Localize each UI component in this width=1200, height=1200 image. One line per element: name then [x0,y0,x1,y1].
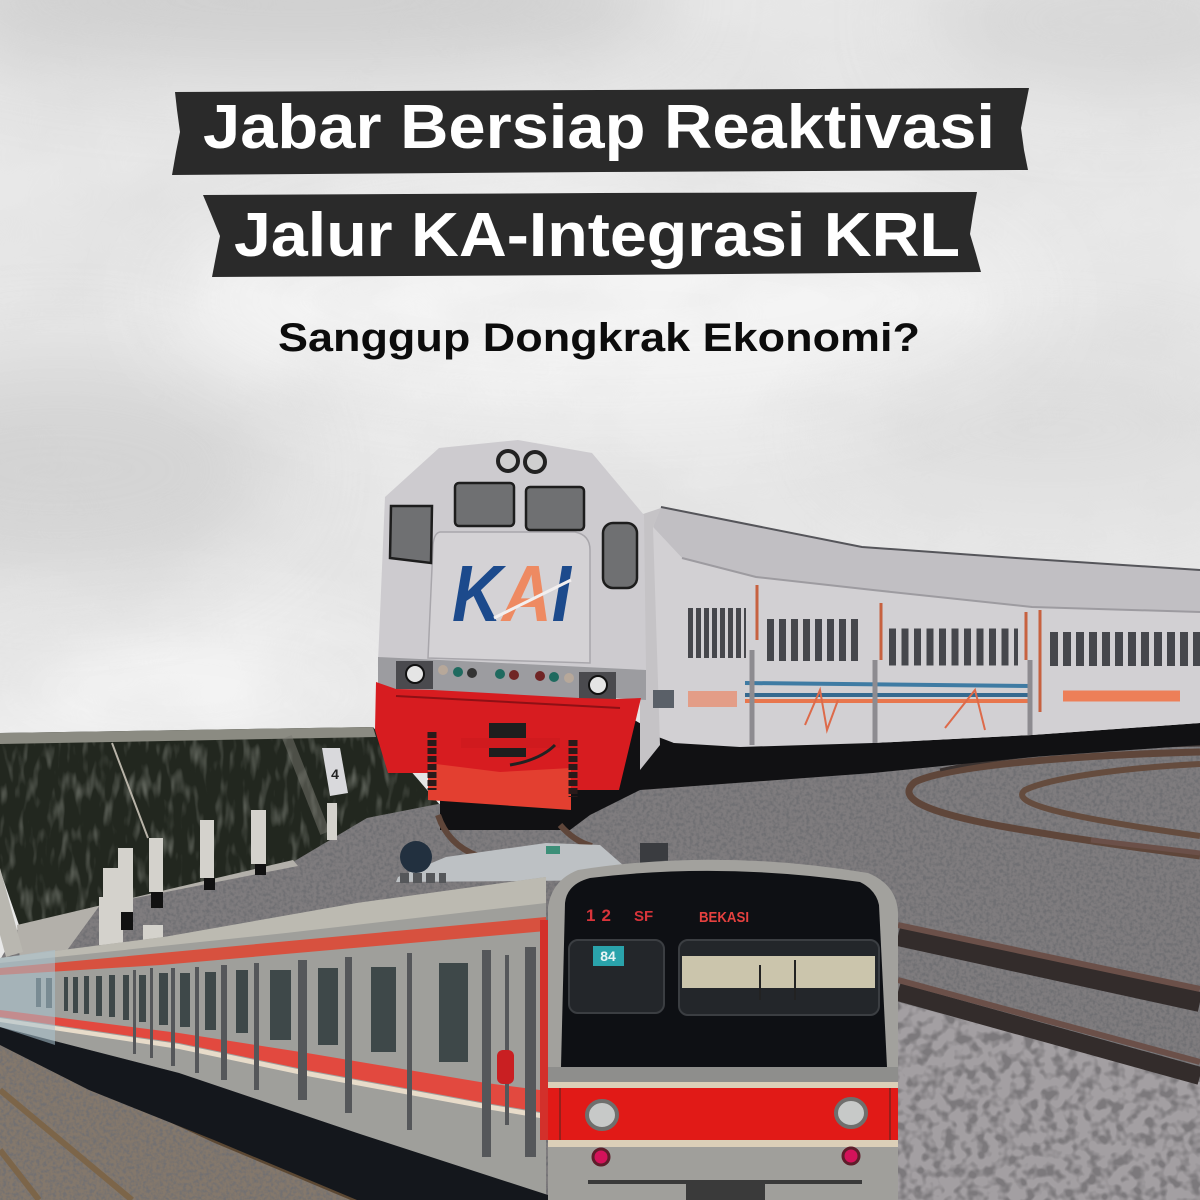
locomotive red front [375,682,641,790]
locomotive headlights [498,451,545,472]
carriage windows [688,633,1200,649]
roof equipment [396,841,668,882]
number plate 84 [593,946,624,966]
curved railway tracks [909,745,1200,856]
upper red stripe [0,917,546,975]
front lamps [587,1099,866,1129]
KRL commuter train [0,841,898,1200]
left cab window [569,940,664,1013]
lamp housings [396,661,616,699]
side roof band [0,877,546,963]
locomotive nose hood [428,532,590,663]
carriage stripes [688,683,1180,730]
underframe [0,1027,548,1200]
locomotive side [640,508,661,770]
title tape line 1 [172,88,1029,175]
carriages roof [653,507,1200,612]
right cab window [679,940,879,1015]
side windows [36,963,468,1062]
undercarriage [440,700,1200,830]
destination display left: 12 [586,906,617,925]
locomotive front body [378,440,646,670]
title tape line 1: Jabar Bersiap Reaktivasi [203,93,995,162]
tail lights [593,1148,859,1165]
wall number sign: 4 [331,766,339,782]
far carriages haze [0,950,55,1045]
destination display left: SF [634,908,653,925]
side body [0,877,546,1200]
locomotive windows [390,483,637,588]
KAI locomotive and carriages [375,440,1200,856]
red corner column [540,920,548,1140]
locomotive lamp panel [378,657,646,700]
fence posts [0,803,337,957]
title tape line 2: Jalur KA-Integrasi KRL [234,201,960,270]
subtitle: Sanggup Dongkrak Ekonomi? [278,316,920,360]
wall number sign [322,748,348,796]
window sunshade [682,956,875,988]
bottom-left tracks [0,1040,360,1200]
front body [548,860,898,1200]
gravel ground [0,740,1200,1200]
KAI logo: KAI [452,549,573,638]
number plate 84: 84 [600,948,616,964]
title block [172,88,1029,360]
straight railway tracks [898,840,1200,1076]
destination display left [586,906,653,925]
lower red stripe [0,1010,540,1112]
red side marker [497,1050,514,1084]
concrete retaining wall [0,725,440,935]
signal lamps [438,665,574,683]
rails under locomotive [438,815,592,856]
side doors [133,947,536,1157]
grey band [548,1067,898,1082]
carriage door lines [757,585,1040,712]
destination display BEKASI: BEKASI [699,909,749,926]
carriages body [653,527,1200,747]
red band [548,1088,898,1140]
lower body [548,1140,898,1147]
windshield [561,871,887,1067]
